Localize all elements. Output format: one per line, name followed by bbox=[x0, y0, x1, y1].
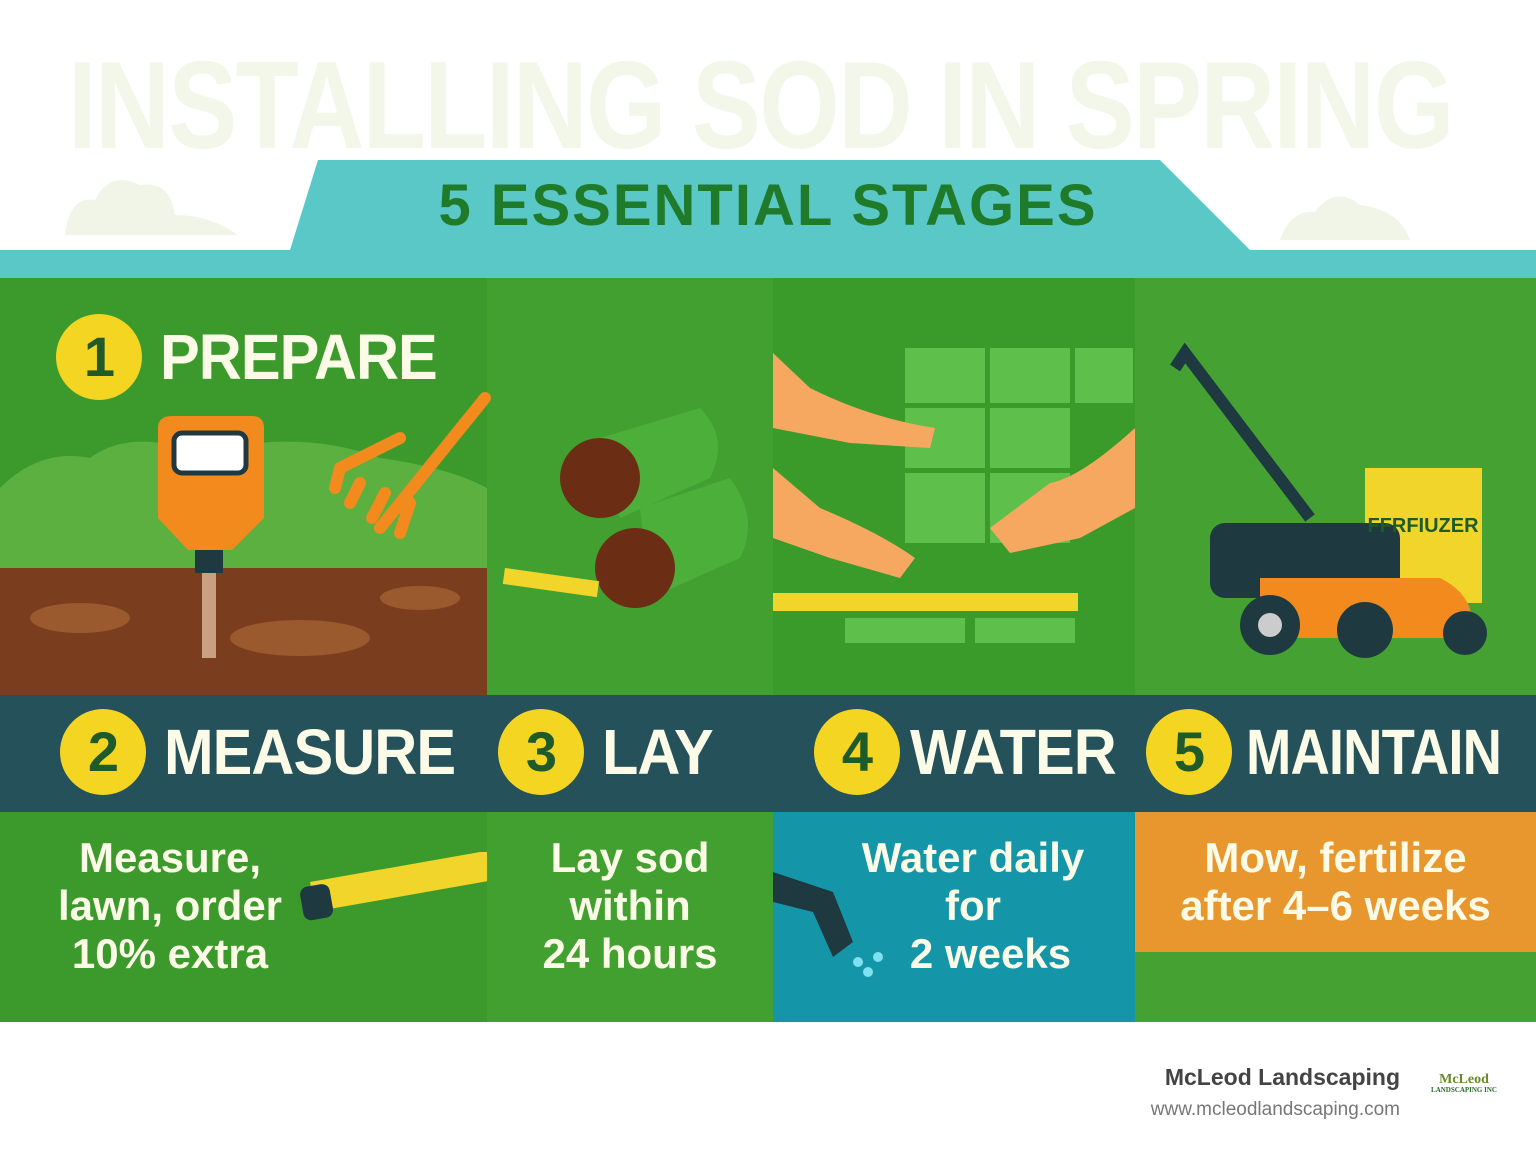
logo: McLeod bbox=[1439, 1072, 1489, 1087]
heading: step 2: MEASURE bbox=[164, 716, 455, 788]
icon: clouds bbox=[65, 180, 1410, 240]
panel: lay text: within bbox=[569, 882, 691, 929]
heading: step 2: 2 bbox=[88, 720, 118, 783]
panel: lay text: 24 hours bbox=[542, 930, 718, 977]
icon: sod rolls bbox=[503, 408, 748, 608]
icon: tape measure bbox=[300, 852, 487, 920]
heading: step 4: 4 bbox=[842, 720, 872, 783]
panel: lay text bbox=[487, 812, 773, 1022]
panel: measure text: lawn, order bbox=[58, 882, 282, 929]
panel: lay text: Lay sod bbox=[551, 834, 709, 881]
panel: maintain text: after 4–6 weeks bbox=[1180, 882, 1491, 929]
heading: step 3 bbox=[498, 709, 713, 795]
heading: step 1: PREPARE bbox=[160, 321, 437, 393]
icon: hose bbox=[773, 872, 883, 977]
teal banner bbox=[0, 160, 1536, 278]
heading: step 1 bbox=[56, 314, 437, 400]
heading: step 3: LAY bbox=[602, 716, 713, 788]
subtitle: 5 ESSENTIAL STAGES bbox=[438, 173, 1098, 238]
heading: step 3: 3 bbox=[526, 720, 556, 783]
heading: step 5: MAINTAIN bbox=[1246, 716, 1501, 788]
panel: water text bbox=[773, 812, 1135, 1022]
heading: step 1: 1 bbox=[84, 325, 114, 388]
panel: illustrations bbox=[0, 278, 1536, 695]
soil bbox=[0, 568, 487, 695]
panel: water text: Water daily bbox=[862, 834, 1084, 881]
heading: step 4 bbox=[814, 709, 1116, 795]
icon: rake bbox=[335, 398, 485, 533]
panel: water text: 2 weeks bbox=[910, 930, 1071, 977]
heading: step 5: 5 bbox=[1174, 720, 1204, 783]
band: steps 2-5 bbox=[0, 695, 1536, 812]
footer: company name: McLeod Landscaping bbox=[1165, 1064, 1400, 1090]
logo: LANDSCAPING INC bbox=[1431, 1086, 1497, 1094]
panel: maintain text bbox=[1135, 812, 1536, 1022]
icon: bushes bbox=[0, 442, 487, 578]
heading: step 5 bbox=[1146, 709, 1501, 795]
heading: step 4: WATER bbox=[910, 716, 1116, 788]
panel: measure text: 10% extra bbox=[72, 930, 268, 977]
icon: lawn mower bbox=[1175, 353, 1487, 658]
logo bbox=[1431, 1072, 1497, 1094]
label: fertilizer: FFRFIUZER bbox=[1367, 515, 1479, 537]
panel: water text: for bbox=[945, 882, 1001, 929]
icon: sod grid and hands bbox=[773, 348, 1135, 643]
footer: url: www.mcleodlandscaping.com bbox=[1151, 1099, 1400, 1120]
panel: measure text: Measure, bbox=[79, 834, 261, 881]
panel: measure text bbox=[0, 812, 487, 1022]
heading: step 2 bbox=[60, 709, 455, 795]
panel: maintain text: Mow, fertilize bbox=[1204, 834, 1467, 881]
title: INSTALLING SOD IN SPRING bbox=[68, 37, 1453, 175]
icon: soil tester bbox=[158, 416, 264, 658]
